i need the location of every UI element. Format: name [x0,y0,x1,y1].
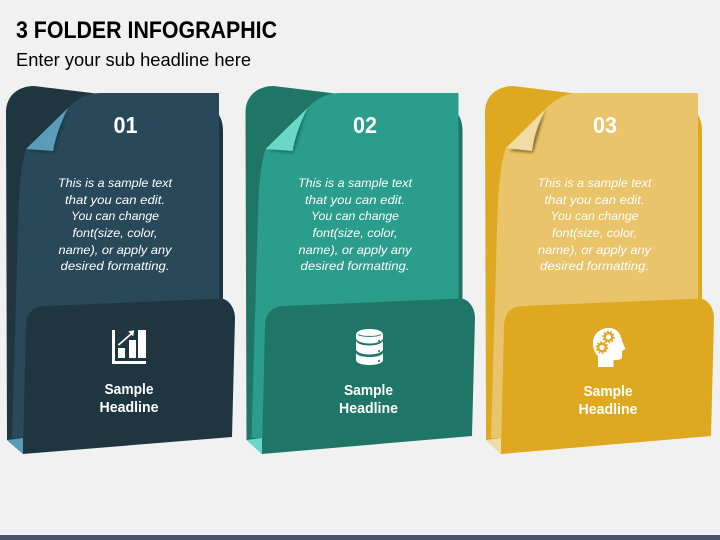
icon: head with gears [593,328,626,367]
body text: desired formatting. [300,259,410,273]
panel: folder 03 [485,86,714,454]
body text: You can change [550,209,639,223]
pocket [262,298,475,454]
subtitle: Enter your sub headline here [16,50,251,70]
panel: folder 01 [6,86,235,454]
pocket [23,298,235,454]
headline: Headline [339,401,398,417]
curl shadow [30,108,68,153]
folder sheet [12,93,219,438]
body text: desired formatting. [540,259,649,273]
icon: database [356,329,383,365]
curl shadow [509,109,546,153]
headline [578,384,638,418]
bottom corner fold [7,438,23,454]
body text: You can change [71,209,159,223]
body text: that you can edit. [544,193,644,207]
body text: This is a sample text [58,176,173,190]
body text: that you can edit. [65,193,165,207]
title: 3 FOLDER INFOGRAPHIC [16,17,277,44]
bottom corner fold [486,438,501,454]
body text: name), or apply any [538,243,652,257]
folder back [6,86,223,454]
folder sheet [491,93,698,438]
headline [339,383,398,417]
body text: name), or apply any [298,243,413,257]
headline: Sample [344,383,393,399]
body text: font(size, color, [72,226,158,240]
folder back [246,86,462,454]
number: 02 [353,112,377,138]
bottom bar [0,535,720,540]
page curl [506,110,545,151]
headline: Sample [104,382,154,398]
body text: desired formatting. [60,259,170,273]
headline: Headline [578,402,638,418]
icon: bar chart [112,330,146,364]
body text: You can change [311,209,399,223]
body text: This is a sample text [538,176,652,190]
curl shadow [270,108,308,153]
body text [58,176,173,273]
body text: This is a sample text [298,176,413,190]
page curl [266,108,308,151]
pocket [501,298,714,454]
body text [298,176,413,273]
headline [100,382,158,416]
body text: font(size, color, [552,226,637,240]
body text [538,176,652,273]
panel: folder 02 [246,86,475,454]
body text: name), or apply any [58,243,173,257]
bottom corner fold [246,438,262,454]
number: 01 [114,112,138,138]
headline: Sample [584,384,632,400]
folder sheet [252,93,458,438]
headline: Headline [100,400,158,416]
folder back [485,86,702,454]
body text: font(size, color, [312,226,398,240]
body text: that you can edit. [305,193,405,207]
number: 03 [593,112,617,138]
page curl [26,108,68,151]
